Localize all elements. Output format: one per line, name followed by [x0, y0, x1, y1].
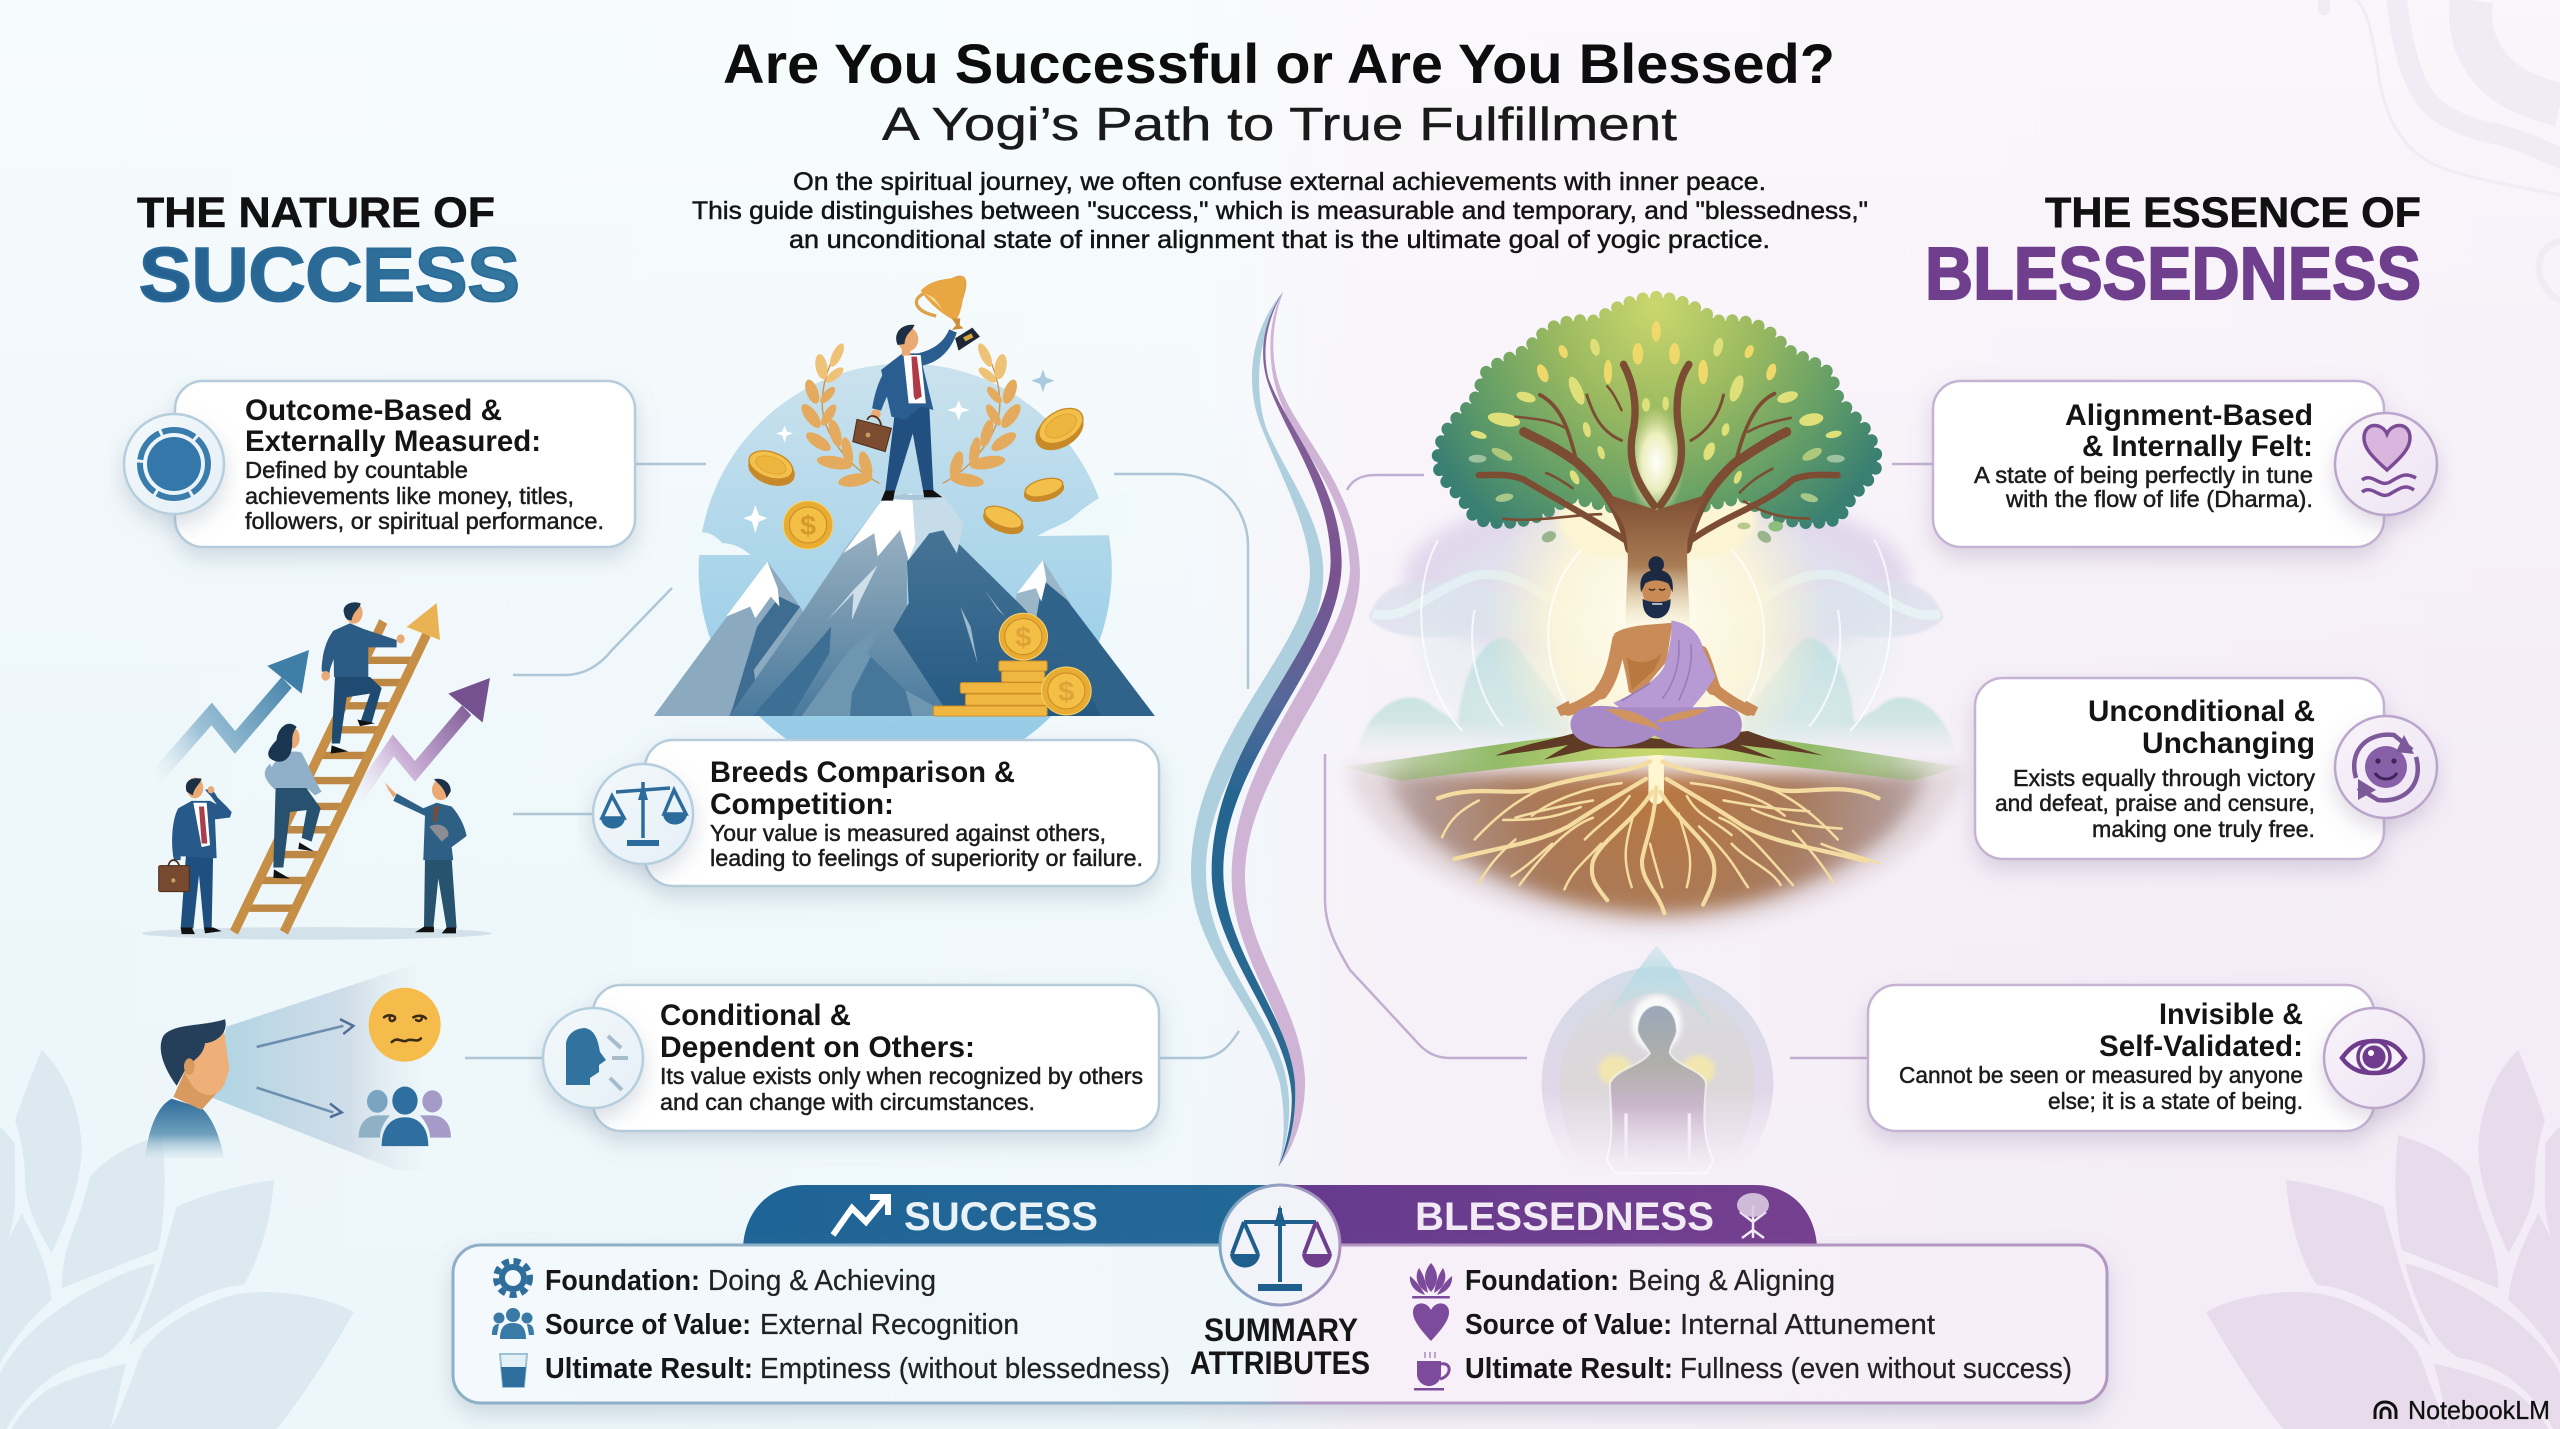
small mountains [654, 560, 1155, 716]
lotus watermark bottom left [0, 1050, 354, 1429]
connector lines [465, 464, 1940, 1058]
card: unconditional: Exists equally through victory [2013, 765, 2316, 791]
card: alignment-based: Alignment-Based [2065, 399, 2313, 432]
success tab [743, 1185, 1280, 1247]
blessedness tab [1280, 1185, 1817, 1247]
icon: heart [1413, 1303, 1449, 1341]
illustration: yogi under the tree of life [1340, 297, 1964, 931]
arrows [257, 1019, 353, 1117]
center label [1190, 1312, 1370, 1381]
card: unconditional: making one truly free. [2092, 816, 2315, 842]
tree canopy [1438, 297, 1877, 627]
title: Are You Successful or Are You Blessed? [723, 32, 1835, 95]
blessedness tab: BLESSEDNESS [1415, 1195, 1714, 1239]
blessedness rows: Foundation: [1465, 1265, 1619, 1297]
card: breeds comparison: leading to feelings of superiority or failure. [710, 845, 1143, 871]
card: unconditional: Unconditional & [2088, 695, 2315, 728]
success rows: Foundation: [545, 1265, 700, 1297]
card: alignment-based [1933, 381, 2437, 547]
success rows: Ultimate Result: [545, 1353, 753, 1385]
grass mound [1340, 731, 1964, 781]
businessman holding trophy [853, 325, 957, 501]
leaves [1469, 321, 1845, 545]
coin stacks: $ [1015, 622, 1032, 654]
lotus watermark bottom right [2206, 1050, 2560, 1429]
success rows: Emptiness (without blessedness) [760, 1353, 1170, 1385]
icon: smile in cycle arrows [2335, 716, 2437, 818]
card: unconditional: Unchanging [2142, 727, 2315, 760]
left heading: the nature of success: SUCCESS [139, 233, 520, 318]
card: alignment-based: A state of being perfectly in tune [1974, 462, 2313, 488]
card: conditional: Dependent on Others: [660, 1031, 975, 1064]
icon: half-empty glass [500, 1354, 527, 1387]
icon: balance scale medallion [1220, 1185, 1340, 1305]
card: outcome-based: Defined by countable [245, 457, 468, 483]
blue growth arrow [155, 650, 309, 779]
right heading: the essence of blessedness: BLESSEDNESS [1925, 232, 2421, 315]
card: invisible: else; it is a state of being. [2048, 1088, 2303, 1114]
card: alignment-based: & Internally Felt: [2082, 430, 2313, 463]
success rows: Source of Value: [545, 1309, 751, 1341]
blessedness rows: Internal Attunement [1680, 1309, 1935, 1341]
subtitle: A Yogi’s Path to True Fulfillment [882, 98, 1677, 150]
card: invisible [1868, 985, 2424, 1131]
card: outcome-based: Outcome-Based & [245, 394, 502, 427]
blessedness rows: Ultimate Result: [1465, 1353, 1673, 1385]
icon: lotus [1410, 1263, 1452, 1298]
card: breeds comparison [593, 740, 1159, 886]
card: alignment-based: with the flow of life (Dharma). [2005, 486, 2313, 512]
card: breeds comparison: Your value is measured against others, [710, 820, 1106, 846]
branches [1479, 365, 1838, 549]
center label: SUMMARY [1204, 1312, 1358, 1348]
top climber [321, 602, 405, 754]
center label: ATTRIBUTES [1190, 1345, 1370, 1381]
laurel wreath left [798, 342, 879, 489]
group of people icon [359, 1087, 451, 1146]
card: invisible: Self-Validated: [2099, 1030, 2303, 1063]
card: conditional: Conditional & [660, 999, 851, 1032]
energy aura [1356, 445, 1956, 792]
flying coins [745, 401, 1090, 538]
icon: eye [2324, 1008, 2424, 1108]
card: breeds comparison: Breeds Comparison & [710, 756, 1015, 789]
icon: gear [496, 1261, 530, 1295]
card: invisible: Invisible & [2159, 998, 2303, 1031]
main peak [730, 493, 1101, 716]
card: conditional [543, 985, 1159, 1131]
success rows: External Recognition [760, 1309, 1019, 1341]
icon: people [492, 1308, 534, 1339]
head and shoulders [145, 1019, 229, 1158]
card: invisible: Cannot be seen or measured by anyone [1899, 1062, 2303, 1088]
meditating yogi [1495, 556, 1823, 760]
clouds [692, 493, 1129, 555]
card: outcome-based [124, 381, 635, 547]
panel: summary attributes [453, 1185, 2107, 1403]
purple growth arrow [357, 678, 490, 799]
illustration: mountain summit with trophy [654, 277, 1155, 777]
coin stacks [933, 613, 1091, 716]
card: unconditional [1975, 678, 2437, 859]
blessedness rows: Being & Aligning [1628, 1265, 1835, 1297]
left heading: the nature of success [137, 189, 520, 318]
dollar coin [783, 501, 833, 549]
blessedness rows: Source of Value: [1465, 1309, 1672, 1341]
decorative swirls top right [2324, 0, 2560, 300]
laurel wreath right [943, 342, 1024, 489]
unhappy emoji [369, 988, 441, 1062]
icon: heart over waves [2335, 413, 2437, 515]
icon: full cup [1414, 1352, 1449, 1390]
right heading: the essence of blessedness [1925, 189, 2421, 315]
illustration: aura silhouette [1542, 945, 1773, 1177]
summary box [453, 1245, 2107, 1403]
card: outcome-based: achievements like money, titles, [245, 483, 574, 509]
success rows [492, 1261, 1170, 1387]
trophy [916, 277, 980, 351]
success rows: Doing & Achieving [708, 1265, 936, 1297]
card: conditional: Its value exists only when recognized by others [660, 1063, 1143, 1089]
sparkles [743, 369, 1055, 533]
blessedness rows [1410, 1263, 2072, 1390]
card: outcome-based: Externally Measured: [245, 425, 541, 458]
intro paragraph: an unconditional state of inner alignment that is the ultimate goal of yogic practice. [789, 226, 1770, 254]
central flowing divider [1191, 291, 1360, 1167]
coin stacks: $ [1058, 676, 1075, 708]
ladder [234, 603, 440, 932]
dollar coin: $ [800, 510, 816, 542]
man pointing [385, 779, 467, 933]
woman climber [265, 724, 322, 879]
success tab: SUCCESS [904, 1195, 1098, 1239]
man with briefcase [159, 778, 232, 934]
left heading: the nature of success: THE NATURE OF [137, 189, 495, 237]
intro paragraph: On the spiritual journey, we often confuse external achievements with inner peace. [793, 168, 1766, 196]
right heading: the essence of blessedness: THE ESSENCE OF [2045, 189, 2421, 237]
illustration: people climbing the ladder [142, 602, 492, 940]
card: breeds comparison: Competition: [710, 788, 894, 821]
card: conditional: and can change with circumstances. [660, 1089, 1035, 1115]
NotebookLM logo: NotebookLM [2408, 1395, 2550, 1425]
icon: scales [593, 764, 693, 864]
illustration: person seeking approval [145, 964, 451, 1170]
blessedness rows: Fullness (even without success) [1680, 1353, 2072, 1385]
intro paragraph [692, 168, 1868, 254]
card: outcome-based: followers, or spiritual performance. [245, 508, 604, 534]
soil with roots [1348, 753, 1964, 931]
card: unconditional: and defeat, praise and censure, [1995, 790, 2315, 816]
icon: gear target [124, 414, 224, 514]
icon: head with incoming arrows [543, 1008, 643, 1108]
intro paragraph: This guide distinguishes between "success," which is measurable and temporary, and "blessedness," [692, 197, 1868, 225]
